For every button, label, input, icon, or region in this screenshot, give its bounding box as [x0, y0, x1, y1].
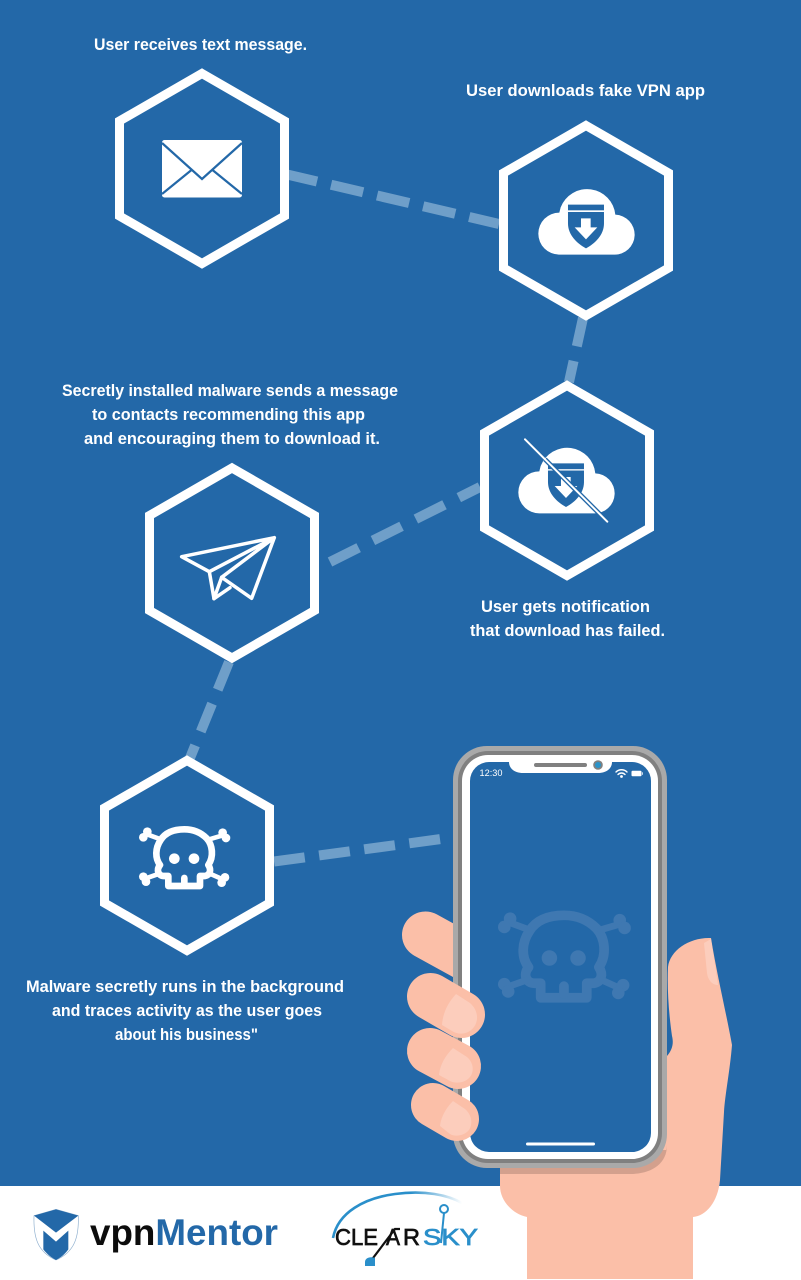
phone shadow on hand — [500, 1145, 667, 1174]
caption: secretly installed malware: and encouraging them to download it. — [84, 429, 380, 448]
dashed connector: failed to send — [330, 487, 480, 562]
ClearSky slash and node — [370, 1229, 400, 1262]
step 4: paper plane hexagon — [150, 468, 314, 658]
ClearSky wordmark: R — [403, 1224, 420, 1250]
home indicator — [526, 1142, 595, 1146]
hexagon outline — [504, 126, 668, 316]
step 1: message hexagon — [120, 74, 284, 264]
icon: skull and crossbones — [139, 827, 230, 887]
vpnMentor wordmark: vpnMentor — [90, 1212, 278, 1253]
caption: user gets notification: User gets notification — [481, 597, 650, 616]
ClearSky wordmark: CLE — [335, 1224, 378, 1250]
third finger — [430, 1048, 473, 1083]
top finger behind phone — [426, 935, 480, 965]
caption: user gets notification: that download has failed. — [470, 621, 665, 640]
hand: palm, wrist and thumb — [500, 938, 732, 1279]
notch with speaker and camera — [509, 760, 612, 773]
hand and phone illustration — [426, 746, 732, 1279]
ClearSky wordmark: A — [386, 1224, 401, 1250]
screen — [470, 762, 651, 1152]
dashed connector: malware to phone — [274, 839, 441, 862]
hexagon outline — [120, 74, 284, 264]
dashed connector: download to failed — [569, 318, 583, 382]
caption: malware secretly runs: Malware secretly runs in the background — [26, 977, 344, 996]
logo: ClearSky — [333, 1193, 478, 1266]
ClearSky wordmark — [335, 1224, 478, 1250]
icon: paper plane — [182, 538, 274, 599]
hexagon outline — [104, 760, 270, 950]
ClearSky arc — [333, 1193, 462, 1238]
caption: malware secretly runs: and traces activity as the user goes — [52, 1001, 322, 1020]
ghost skull on screen — [498, 912, 631, 999]
hexagon outline — [484, 386, 650, 576]
icon: cloud with shield download — [538, 189, 635, 255]
dashed connector: message to download — [285, 174, 499, 224]
caption: secretly installed malware: to contacts recommending this app — [92, 405, 365, 424]
thumb nail highlight — [704, 939, 718, 985]
caption: user gets notification — [470, 597, 665, 640]
icon: envelope — [162, 140, 242, 198]
step 3: failed download hexagon — [484, 386, 650, 576]
ClearSky antenna — [440, 1205, 448, 1243]
caption: malware secretly runs: about his business" — [115, 1025, 258, 1044]
step 5: skull hexagon — [104, 760, 270, 950]
logo: vpnMentor — [34, 1209, 278, 1260]
dashed connector: send to malware — [190, 662, 229, 758]
ClearSky wordmark: SKY — [423, 1224, 478, 1250]
fourth finger — [433, 1101, 471, 1136]
second finger — [430, 994, 477, 1034]
caption: secretly installed malware — [62, 381, 398, 448]
caption: secretly installed malware: Secretly installed malware sends a message — [62, 381, 398, 400]
status bar wifi icon — [616, 770, 627, 777]
phone — [453, 746, 667, 1168]
status bar battery icon — [632, 771, 643, 776]
vpnMentor shield — [34, 1209, 78, 1260]
caption: malware secretly runs — [26, 977, 344, 1044]
ClearSky node blob — [365, 1257, 375, 1266]
step 2: download hexagon — [504, 126, 668, 316]
caption: user downloads fake VPN app: User downloads fake VPN app — [466, 81, 705, 100]
hexagon outline — [150, 468, 314, 658]
icon: cloud with crossed out shield — [518, 439, 615, 522]
caption: user receives text message: User receives text message. — [94, 35, 307, 54]
status bar clock: 12:30 — [480, 768, 502, 779]
